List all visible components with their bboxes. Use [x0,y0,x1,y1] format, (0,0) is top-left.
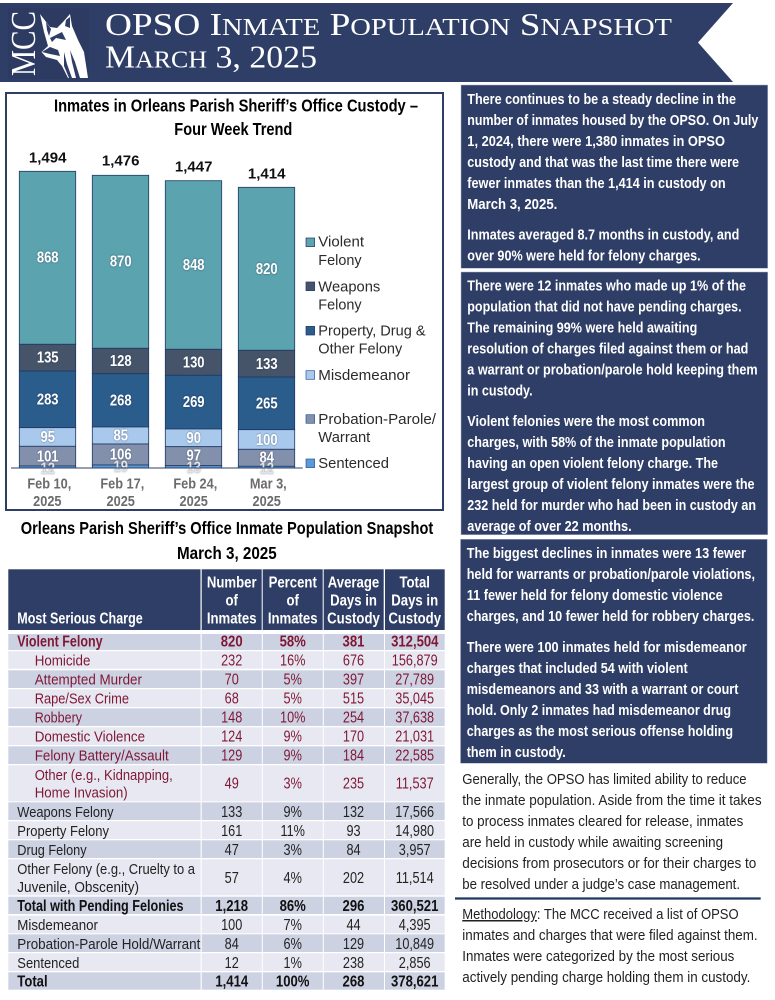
row: Rape/Sex Crime: 5% [284,691,302,708]
row: Attempted Murder: 27,789 [395,672,434,689]
bar: Mar 3, 2025: Mar 3, [250,474,287,492]
bar: Feb 17, 2025: 870 [110,254,132,271]
row: Probation-Parole Hold/Warrant: 10,849 [395,936,434,953]
row: Drug Felony: 3% [284,842,302,859]
row: Total with Pending Felonies: 86% [280,898,306,915]
row: Weapons Felony: 9% [284,804,302,821]
row: Weapons Felony: Weapons Felony [17,804,114,821]
bar: Feb 10, 2025: 868 [37,250,59,267]
row: Other Felony: 57 [225,870,239,887]
table: population snapshot [8,569,445,991]
bar: Feb 24, 2025: 2025 [180,492,208,509]
row: Sentenced: Sentenced [17,955,79,972]
row: Rape/Sex Crime: 515 [343,691,364,708]
bar: Feb 17, 2025: 268 [110,392,132,410]
title: OPSO I NMATE POPULATION SNAPSHOT [105,6,672,42]
row: Robbery [35,710,434,727]
bar: Mar 3, 2025: 100 [256,432,278,449]
row: Other Felony: 11,514 [396,870,434,887]
table header: Total [399,574,430,592]
row: Other Felony: Other Felony (e.g., Cruelty to a [17,861,195,878]
header banner [0,3,733,82]
table header: Days in [330,592,377,610]
row: Robbery: 10% [280,710,306,727]
table header: Days in [391,592,438,610]
row: Rape/Sex Crime: 35,045 [395,691,434,708]
row: Total with Pending Felonies: 360,521 [391,898,438,915]
row: Attempted Murder: Attempted Murder [35,672,142,689]
row: Drug Felony: 84 [346,842,361,859]
row: Probation-Parole Hold/Warrant: 84 [225,936,239,953]
bar: Feb 10, 2025: 101 [37,448,59,466]
table header: Custody [388,610,441,628]
bar: Feb 17, 2025: 2025 [107,492,135,509]
row: Violent Felony: 820 [221,634,243,651]
row: Robbery: 148 [221,710,242,727]
panel: steady decline: 1, 2024, there were 1,380 inmates in OPSO [467,133,725,150]
bar: Mar 3, 2025: 12 [259,460,274,478]
row: Domestic Violence: 170 [343,729,364,746]
bar: Feb 10, 2025: Feb 10, [27,474,71,492]
row: Attempted Murder [35,672,434,689]
row: Felony Battery/Assault: Felony Battery/Assault [35,748,169,765]
row: Total with Pending Felonies: Total with Pending Felonies [17,898,184,915]
chart title: Inmates in Orleans Parish Sheriff’s Office Custody – [54,96,418,116]
chart legend: Sentenced [318,456,389,472]
bar: Feb 17, 2025: 85 [113,428,128,445]
row: Weapons Felony: 132 [343,804,364,821]
row: Other Felony: 4% [284,870,302,887]
panel: biggest declines: charges that included 54 with violent [467,660,688,677]
panel: pending charges: The remaining 99% were held awaiting [467,320,697,337]
bar: Feb 24, 2025 [165,159,222,509]
row: Probation-Parole Hold/Warrant: 129 [343,936,364,953]
row: Property Felony: 11% [281,823,305,840]
row: Weapons Felony [17,804,434,821]
row: Misdemeanor: Misdemeanor [17,917,98,934]
row: Property Felony: 93 [346,823,361,840]
row: Homicide: 232 [221,653,242,670]
row: Robbery: Robbery [35,710,82,727]
row: Probation-Parole Hold/Warrant: Probation-Parole Hold/Warrant [17,936,201,953]
table header: Inmates [207,610,257,628]
bar: Feb 24, 2025: 848 [183,257,205,274]
table header: of [225,592,238,610]
row: Other violent: Home Invasion) [35,785,128,802]
row: Sentenced: 2,856 [399,955,431,972]
row: Felony Battery/Assault: 9% [284,748,302,765]
bar: Mar 3, 2025 [238,165,295,509]
title: MARCH 3, 2025 [105,38,317,74]
bar: Feb 10, 2025: 2025 [33,492,62,509]
chart legend: Felony [318,297,362,313]
bar: Feb 17, 2025 [92,153,149,509]
chart legend: Other Felony [318,342,403,358]
row: Weapons Felony: 133 [221,804,242,821]
row: Domestic Violence [35,729,434,746]
text block: limited ability: be resolved under a judge’s case management. [462,876,740,893]
row: Property Felony [17,823,434,840]
bar: Feb 24, 2025: 1,447 [175,159,212,176]
row: Sentenced: 1% [284,955,302,972]
bar: Feb 24, 2025: 269 [183,394,205,411]
row: Total with Pending Felonies [17,898,438,915]
bar: Mar 3, 2025: 1,414 [248,165,286,182]
chart title: Four Week Trend [174,119,292,139]
panel: steady decline [461,85,768,268]
table title: Orleans Parish Sheriff’s Office Inmate Population Snapshot [21,518,433,538]
row: Misdemeanor: 7% [284,917,302,934]
row: Property Felony: 14,980 [395,823,434,840]
panel: pending charges: in custody. [467,382,533,400]
bar: Feb 10, 2025: 283 [37,391,59,409]
bar: Feb 10, 2025: 12 [40,460,55,478]
chart legend: Warrant [318,430,370,446]
panel: biggest declines: them in custody. [467,744,566,761]
row: Other violent: Other (e.g., Kidnapping, [35,767,173,784]
row: Probation-Parole Hold/Warrant: 6% [284,936,302,953]
row: Total: 268 [343,974,364,991]
row: Homicide: 676 [343,653,364,670]
row: Drug Felony: Drug Felony [17,842,87,859]
chart legend: Probation-Parole/ [318,412,437,428]
bar: Mar 3, 2025: 133 [256,356,278,373]
table header: Custody [327,610,380,628]
bar: Feb 24, 2025: 13 [186,459,201,477]
table header [8,569,445,630]
row: Total with Pending Felonies: 296 [343,898,364,915]
row: Total: 1,414 [215,974,249,991]
table title: March 3, 2025 [177,543,277,563]
bar: Feb 10, 2025: 95 [40,429,55,446]
row: Drug Felony: 47 [225,842,239,859]
row: Attempted Murder: 397 [343,672,364,689]
row: Robbery: 37,638 [395,710,434,727]
table header: Average [328,574,379,592]
row: Other violent [35,767,434,802]
panel: steady decline: over 90% were held for felony charges. [467,248,701,265]
row: Rape/Sex Crime: Rape/Sex Crime [35,691,129,708]
bar: Feb 17, 2025: Feb 17, [100,474,144,492]
row: Misdemeanor: 100 [221,917,242,934]
row: Total: Total [17,974,48,991]
chart title [54,96,418,139]
row: Drug Felony: 3,957 [399,842,431,859]
chart legend [306,235,437,472]
bar: Feb 24, 2025: Feb 24, [173,474,217,492]
row: Other Felony: 202 [343,870,364,887]
row: Violent Felony: 312,504 [391,634,439,651]
row: Attempted Murder: 5% [284,672,302,689]
bar: Feb 24, 2025: 97 [186,448,201,465]
bar: Feb 24, 2025: 90 [186,430,201,447]
bar: Feb 10, 2025 [19,149,76,509]
panel: steady decline: March 3, 2025. [467,196,557,213]
text block: methodology: Inmates were categorized by the most serious [462,948,735,965]
row: Misdemeanor: 44 [346,917,361,934]
bar: Mar 3, 2025: 84 [259,450,274,467]
bar: Feb 17, 2025: 106 [110,447,132,464]
panel: steady decline: fewer inmates than the 1,414 in custody on [467,175,726,192]
row: Property Felony: 161 [221,823,242,840]
logo: MCC wolf: MCC [4,11,43,76]
row: Probation-Parole Hold/Warrant [17,936,434,953]
row: Sentenced: 238 [343,955,364,972]
text block: limited ability: are held in custody while awaiting screening [462,834,723,851]
bar: Feb 17, 2025: 19 [113,459,128,476]
row: Domestic Violence: 21,031 [395,729,434,746]
bar: Feb 10, 2025: 1,494 [29,149,67,166]
row: Total with Pending Felonies: 1,218 [215,898,248,915]
row: Rape/Sex Crime: 68 [225,691,239,708]
logo: MCC wolf [4,8,89,79]
row: Homicide: 16% [280,653,306,670]
text block: limited ability [462,771,762,893]
row: Felony Battery/Assault: 184 [343,748,364,765]
table header: of [286,592,299,610]
row: Weapons Felony: 17,566 [395,804,434,821]
bar: Feb 17, 2025: 128 [110,353,132,370]
panel: pending charges [461,272,768,535]
row: Other violent: 11,537 [396,776,434,793]
table header: Most Serious Charge [17,610,143,627]
row: Other Felony [17,861,434,896]
row: Felony Battery/Assault: 129 [221,748,242,765]
bar: Feb 17, 2025: 1,476 [102,153,139,170]
row: Other violent: 49 [225,776,239,793]
row: Violent Felony [17,634,439,651]
row: Total: 100% [276,974,309,991]
chart legend: Felony [318,253,362,269]
row: Sentenced: 12 [225,955,239,972]
row: Total [17,974,438,991]
row: Other violent: 3% [284,776,302,793]
text block: methodology: Methodology: The MCC received a list of OPSO [462,906,739,923]
table header: Percent [269,574,317,592]
text block: limited ability: to process inmates cleared for release, inmates [462,813,744,830]
row: Robbery: 254 [343,710,364,727]
table row backgrounds [8,634,445,990]
row: Violent Felony: 381 [343,634,364,651]
row: Homicide: Homicide [35,653,90,670]
panel: stacked bar chart [6,93,443,510]
panel: pending charges: charges, with 58% of the inmate population [467,434,726,451]
panel: pending charges: Violent felonies were the most common [467,413,705,430]
row: Other violent: 235 [343,776,364,793]
row: Homicide: 156,879 [392,653,438,670]
chart legend: Weapons [318,279,380,295]
chart legend: Violent [318,235,364,251]
bar: Mar 3, 2025: 2025 [253,492,281,509]
table header: Inmates [268,610,318,628]
chart legend: Misdemeanor [318,368,410,384]
panel: biggest declines [460,539,767,763]
bar: Feb 24, 2025: 130 [183,355,205,372]
row: Domestic Violence: 124 [221,729,242,746]
row: Felony Battery/Assault: 22,585 [395,748,434,765]
panel: pending charges: average of over 22 months. [467,518,632,535]
row: Total: 378,621 [391,974,438,991]
row: Sentenced [17,955,431,972]
text block: methodology [462,906,758,986]
row: Other Felony: Juvenile, Obscenity) [17,879,139,896]
bar: Feb 10, 2025: 135 [37,350,59,367]
bar: Mar 3, 2025: 265 [256,395,278,413]
row: Violent Felony: 58% [280,634,306,651]
row: Domestic Violence: Domestic Violence [35,729,145,746]
row: Felony Battery/Assault [35,748,434,765]
row: Misdemeanor: 4,395 [399,917,431,934]
title [105,6,672,74]
row: Property Felony: Property Felony [17,823,109,840]
row: Misdemeanor [17,917,431,934]
panel: pending charges: having an open violent felony charge. The [467,455,718,472]
chart legend: Property, Drug & [318,324,426,340]
row: Attempted Murder: 70 [225,672,239,689]
row: Domestic Violence: 9% [284,729,302,746]
table title [21,518,433,563]
bar: Mar 3, 2025: 820 [256,261,278,278]
row: Homicide [35,653,438,670]
panel: biggest declines: 11 fewer held for felony domestic violence [467,587,723,604]
row: Violent Felony: Violent Felony [17,634,103,651]
row: Drug Felony [17,842,431,859]
table header: Number [207,574,257,592]
row: Rape/Sex Crime [35,691,434,708]
